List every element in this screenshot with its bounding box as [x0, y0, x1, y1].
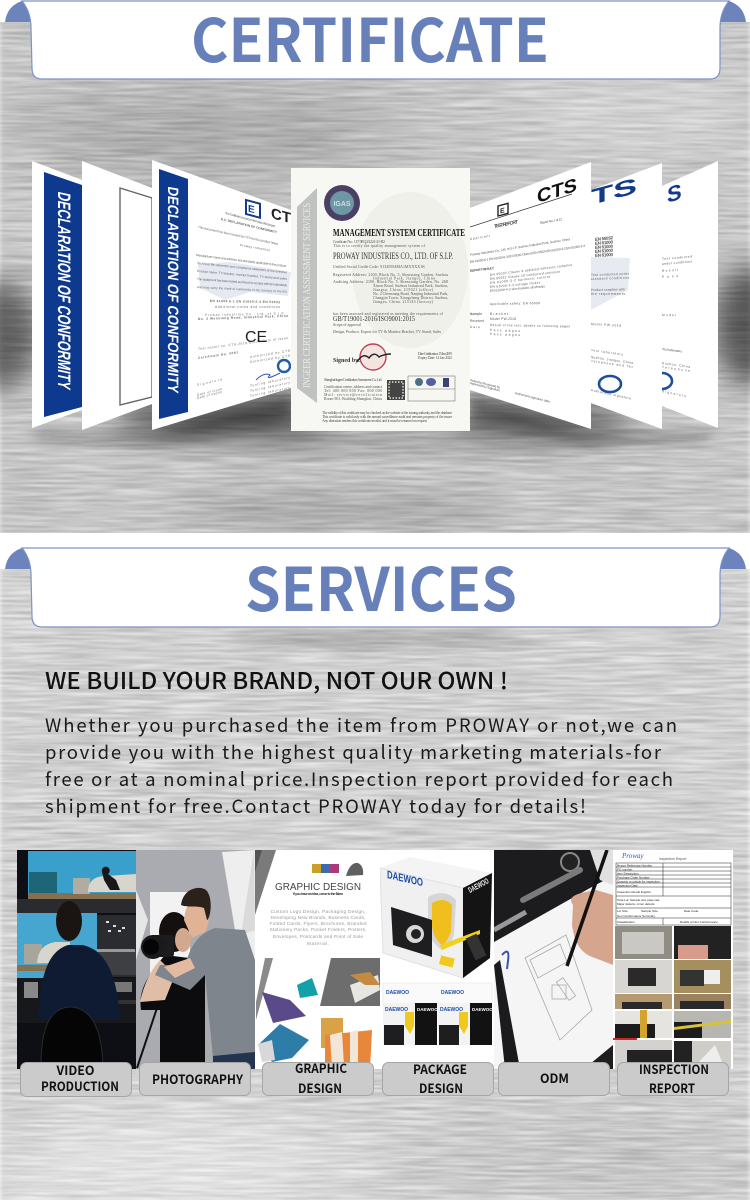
certificate page: CTS report with seal [591, 160, 662, 432]
page text: Result [662, 268, 678, 273]
certificate text: Expiry Date: 14 Jan 2022 [418, 356, 452, 360]
side band text: INGEER CERTIFICATION ASSESSMENT SERVICES [302, 203, 313, 388]
software icons [312, 864, 339, 873]
page text: standard conditions [591, 276, 629, 281]
hand [571, 890, 613, 965]
certificate text: Any alteration renders this certificate invalid, and it must be returned on request [322, 419, 428, 424]
report text: EN 55032 Clause 10 conducted emission [490, 270, 560, 281]
certificate body text: Testing laboratory [250, 380, 290, 393]
label: video production: PRODUCTION [41, 1076, 119, 1095]
poster title: GRAPHIC DESIGN [275, 882, 361, 893]
report heading: Inspection Report [659, 857, 686, 861]
poster list: Material. [307, 941, 329, 947]
label: graphic design [262, 1058, 374, 1097]
report text: EN 61000-6-1 EN 61000-6-3 EN 55032 Class B EN 55024 EN 61000-3-2 EN 61000-3-3 [470, 244, 585, 264]
certificate body text: This document has been issued by CTS for the product listed [198, 225, 278, 246]
label: graphic design: GRAPHIC [295, 1058, 347, 1077]
document: inspection report: Purchase Order Number [617, 876, 650, 880]
certificate text: Registered Address: 2100, Block No. 5, Shenxiang Garden, Suzhou [333, 273, 448, 278]
label: video production: VIDEO [56, 1060, 94, 1079]
document: inspection report [613, 850, 733, 1069]
certificate text: Xinxu Road, Suzhou Industrial Park, Suzhou, [373, 284, 448, 289]
certificate body text: Additional notes and conditions [215, 305, 280, 309]
document: inspection report: Inspection Result English [617, 890, 651, 894]
report text: Applicable safety: EN 60950 [490, 301, 540, 306]
page text: Telephone [662, 365, 690, 373]
world map watermark [591, 257, 630, 310]
certificate body text: Certificate No. 0091 [198, 350, 238, 360]
report text: Proway Industries Co., Ltd. of S.I.P. Suzhou Industrial Park, Suzhou, China [470, 237, 570, 257]
services description: free or at a nominal price.Inspection report provided for each [45, 766, 673, 792]
signed by: Signed by: [333, 358, 360, 364]
page text: Signature [662, 389, 686, 398]
red stamp and signature [357, 344, 391, 370]
certificate body text: Signature [197, 377, 222, 387]
report text [470, 217, 585, 404]
page text: Test laboratory [591, 348, 623, 357]
certificate page: declaration with CE mark: CT [271, 205, 292, 227]
report logo: Proway [621, 852, 644, 860]
label: photography: PHOTOGRAPHY [152, 1069, 243, 1088]
label: inspection report: REPORT [649, 1078, 695, 1097]
CTS logo: TS [591, 173, 637, 210]
page text: Model PW-2018 [591, 322, 621, 328]
certificate body text: Product name: TV bracket, monitor bracket, TV stand and sales [197, 269, 287, 281]
report text: Bracket [490, 312, 508, 316]
report text: Applicant [470, 234, 490, 241]
certificate text: This is to certify the quality management system of [333, 244, 426, 248]
certificate page: CTS report far right [662, 161, 718, 428]
certificate text: This certificate is valid only with the annual surveillance audit and remains property of the issuer [322, 415, 453, 419]
brushed metal panel: services [0, 569, 750, 1200]
report text: EN 55032 Clause 9 radiated emission complies [490, 263, 572, 277]
blue band [159, 169, 188, 419]
certificate body text: No. 2 Wenxiang Road, Industrial Park, China [198, 314, 288, 321]
brand name: DAEWOO [387, 869, 423, 889]
certificate text: Certificate No.: 117 9EQ2/2221-21-R2 [333, 240, 385, 244]
page text: EN 61000 [595, 239, 613, 246]
label: ODM: ODM [540, 1068, 569, 1087]
cap icon [346, 863, 363, 876]
band text: DECLARATION OF CONFORMITY [54, 190, 74, 391]
certificate text: Tel: 400 000 000 Fax: 000 000 [324, 389, 382, 393]
flat packaging layouts [383, 983, 493, 1045]
report text: Pass pages [490, 332, 520, 337]
services description [45, 712, 677, 819]
central certificate: management system [291, 168, 470, 431]
document: inspection report: PO number [617, 868, 632, 872]
certificate text: Certification centre, address and contact [324, 385, 383, 390]
certificate body text: E.C. DECLARATION OF CONFORMITY [221, 217, 278, 235]
report text: REPORT RESULT [470, 266, 494, 273]
certificate text: Mail: service@certification [324, 393, 382, 397]
certificate text: No. 2 Chenxiang Road, Nanjing Industrial Park, [373, 292, 448, 297]
pencil sketch [525, 935, 592, 1040]
poster list: Custom Logo Design, Packaging Design, [270, 909, 366, 915]
page text: EN 55032 [595, 235, 613, 242]
page text: the requirements [591, 292, 625, 296]
report text: EN 61000-3-2 harmonic current [490, 275, 550, 285]
company name: PROWAY INDUSTRIES CO., LTD. OF S.I.P. [333, 251, 453, 261]
round blue seal [662, 372, 674, 390]
pencil [567, 850, 607, 966]
certificate body text: Date of expiry [197, 390, 222, 400]
label: package design: PACKAGE [413, 1059, 467, 1078]
report text: Sample [470, 312, 482, 316]
report text: EN 61000-3-3 voltage flicker [490, 281, 541, 289]
inspection photos [613, 926, 731, 1069]
round blue seal [599, 376, 621, 392]
label: video production [20, 1060, 132, 1096]
certification mark: E [500, 206, 505, 215]
certificate body text: Authorized by CTS [250, 349, 290, 359]
report text: Result of the test, details on following pages [490, 323, 570, 328]
services description: shipment for free.Contact PROWAY today for details! [45, 793, 586, 819]
page text [662, 254, 692, 398]
certificate body text: The equipment has been tested and found to comply with EN standards [197, 277, 287, 287]
label: ODM [498, 1062, 610, 1096]
flat packaging layouts: DAEWOO [441, 990, 464, 996]
certificate text: Jiangsu, China. 215143 (factory) [373, 300, 434, 305]
page text: Test conducted under [591, 272, 630, 277]
document: inspection report: Details of Non Conformance [680, 920, 718, 924]
report text: Pass pages [490, 328, 520, 333]
document: inspection report: Sample Size [641, 909, 658, 913]
document: inspection report: Report Reference Number [617, 864, 652, 868]
flat packaging layouts: DAEWOO [440, 1007, 463, 1013]
CE mark: CE [245, 329, 267, 346]
heading banner: services [5, 542, 746, 629]
certificate page: test report [470, 160, 591, 432]
band text: DECLARATION OF CONFORMITY [164, 185, 181, 394]
report text: Report No. 1 of 12 [540, 217, 562, 225]
page text: Test laboratory [662, 347, 682, 353]
page text: EN 61000 [595, 252, 613, 258]
certificate body text: Testing laboratory [250, 385, 290, 398]
certificate text: Design, Produce, Export for TV & Monitor Bracket, TV Stand, Sales [333, 330, 441, 335]
certificate body text: and may carry the mark of conformity in the territory of the EU [197, 285, 288, 294]
accreditation marks [408, 376, 455, 401]
page text: under conditions [662, 259, 692, 266]
label: graphic design: DESIGN [298, 1078, 342, 1097]
blue band [44, 172, 82, 417]
certificate body text: Proway Industries [240, 243, 270, 252]
CTS logo: CTS [537, 174, 577, 208]
world map watermark [198, 262, 291, 300]
photo: package design [380, 850, 494, 1069]
QR code [387, 380, 405, 400]
poster list: Stationery Packs, Pocket Folders, Posters, [270, 927, 366, 933]
certificate body text: Proway Industries Co., Ltd. of S.I.P. [205, 312, 285, 317]
report header rule [470, 194, 572, 227]
flat packaging layouts: DAEWOO [417, 1007, 438, 1012]
poster: graphic design [255, 850, 380, 1069]
logo on paper [502, 952, 508, 969]
certificate text: Unified Social Credit Code: 91320594MA1MXXXX1K [333, 265, 425, 269]
poster list: Folded Cards, Flyers, Brochures, Branded [270, 921, 367, 927]
certificate title: MANAGEMENT SYSTEM CERTIFICATE [333, 228, 465, 239]
certificate text: has been assessed and registered as meeting the requirements of [333, 312, 444, 316]
round stamp [278, 360, 290, 372]
report text: Tested by Reviewed by [470, 378, 500, 390]
certificate body text: EN 61000-6-1 EN 61000-6-3 EN 55032 [210, 299, 280, 304]
certificate body text: Test report no. CTS-2018-00125 Date of issue [198, 336, 288, 351]
signature [256, 373, 280, 380]
page text: Suzhou, China [662, 361, 690, 369]
document: inspection report: Inspection Date [617, 884, 638, 888]
certificate text [322, 240, 453, 424]
certificate text: The validity of this certificate may be checked on the website of the issuing authority and the database [322, 411, 452, 415]
heading banner: certificate [5, 0, 746, 80]
report text: Authorized signature date [515, 391, 550, 404]
document: inspection report: Quantity to unlock for inspection [617, 880, 660, 884]
page text: Authorized signature [591, 388, 631, 401]
certificate text: Shanghai Ingeer Certification Assessment Co., Ltd. [324, 378, 382, 383]
report text: Received [470, 319, 484, 323]
page text: Test conducted [662, 254, 692, 261]
report text: EN 61000-4-2 electrostatic discharge [490, 284, 545, 293]
services description: Whether you purchased the item from PROWAY or not,we can [45, 712, 677, 738]
certificate text: Industrial Park, Jiangsu, China [373, 276, 435, 282]
report table [616, 863, 731, 925]
certificate text: Scope of approval [333, 323, 361, 327]
IGAS seal [324, 185, 360, 221]
document: inspection report: Total Lot: Sample size pass rate [617, 898, 660, 902]
poster subtitle: If you have an idea, come to the Bizro [293, 892, 343, 896]
flat packaging layouts: DAEWOO [472, 1007, 493, 1012]
label: photography [140, 1062, 250, 1096]
tagline: WE BUILD YOUR BRAND, NOT OUR OWN ! [45, 662, 508, 696]
page text: Product complies with [591, 287, 625, 292]
report text: Approved by Signature [470, 381, 500, 393]
page text: EN 61000 [595, 244, 613, 250]
picture frame [120, 188, 152, 405]
label: inspection report: INSPECTION [639, 1059, 709, 1078]
photo: ODM sketch [494, 850, 613, 1069]
certificate text: Date Certification: 15 Jan 2019 [418, 352, 452, 356]
certificate body text: The Certificate is issued on the basis of test report [225, 211, 275, 228]
photo: photography [136, 850, 255, 1069]
certificate body text: Technical file reference and compliance statement of the directive [197, 261, 287, 274]
document: inspection report: Non Conformance Summary [617, 914, 656, 918]
heading text: services: SERVICES [245, 542, 517, 629]
flat packaging layouts: DAEWOO [385, 1007, 408, 1013]
certification mark [498, 203, 508, 216]
services description: provide you with the highest quality marketing materials-for [45, 739, 662, 765]
document: inspection report: Date Code [684, 909, 699, 913]
label: package design: DESIGN [419, 1078, 463, 1097]
certificate body text [196, 211, 290, 400]
document: inspection report: Lot Size [617, 909, 628, 913]
page text: Model [662, 313, 676, 317]
certificate page: declaration far left [32, 160, 82, 430]
document: inspection report: Classification [617, 920, 635, 924]
certificate body text: Manufacturer name and address, test standards applicable to the product [196, 253, 286, 268]
poster list: Envelopes, Postcards and Point of Sale [273, 934, 363, 940]
label: package design [382, 1059, 494, 1097]
report text: Model PW-2018 [490, 317, 516, 321]
brushed metal panel: certificate [0, 22, 750, 533]
certificate page: declaration with CE mark [152, 160, 292, 432]
certificate body text: Date of issue [197, 387, 222, 397]
CTS logo: E [248, 204, 255, 216]
poster list: Developing New Brands, Business Cards, [270, 915, 366, 921]
flat packaging layouts: DAEWOO [386, 990, 409, 996]
page text: Suzhou, Jiangsu, China [591, 355, 633, 365]
poster list [270, 909, 367, 947]
certificate body text: Testing laboratory [250, 375, 290, 388]
IGAS seal: IGAS [333, 201, 351, 208]
document: inspection report: Item Description [617, 872, 639, 876]
report text: Date [470, 325, 480, 329]
CTS logo: S [667, 179, 682, 208]
certificate text: Room 901, Building Shanghai, China [324, 397, 382, 402]
grey side band [297, 188, 317, 403]
certificate text: Changjia Town, Xiangcheng District, Suzhou, [373, 296, 448, 301]
certificate text: Jiangsu, China. 215021 (office) [373, 288, 434, 293]
report text: TEST REPORT [494, 219, 519, 230]
standard number: GB/T19001-2016/ISO9001:2015 [333, 314, 415, 323]
certificate page: blank framed [82, 160, 152, 432]
page text: Telephone and fax [591, 359, 633, 369]
photo: package design: DAEWOO [467, 876, 490, 895]
page text [591, 235, 633, 401]
certificate body text: Authorized by CTS [250, 354, 290, 364]
certificate text: Auditing Address: 2100, Block No. 5, Shenxiang Garden, No. 268 [333, 280, 448, 285]
CTS logo [246, 200, 260, 218]
photo: video production [17, 850, 136, 1069]
shadow beneath certificates [32, 394, 718, 445]
label: inspection report [618, 1059, 728, 1097]
page text: Pass [662, 274, 678, 279]
document: inspection report: Major defects, minor defects [617, 902, 655, 906]
page text: EN 61000 [595, 248, 613, 254]
